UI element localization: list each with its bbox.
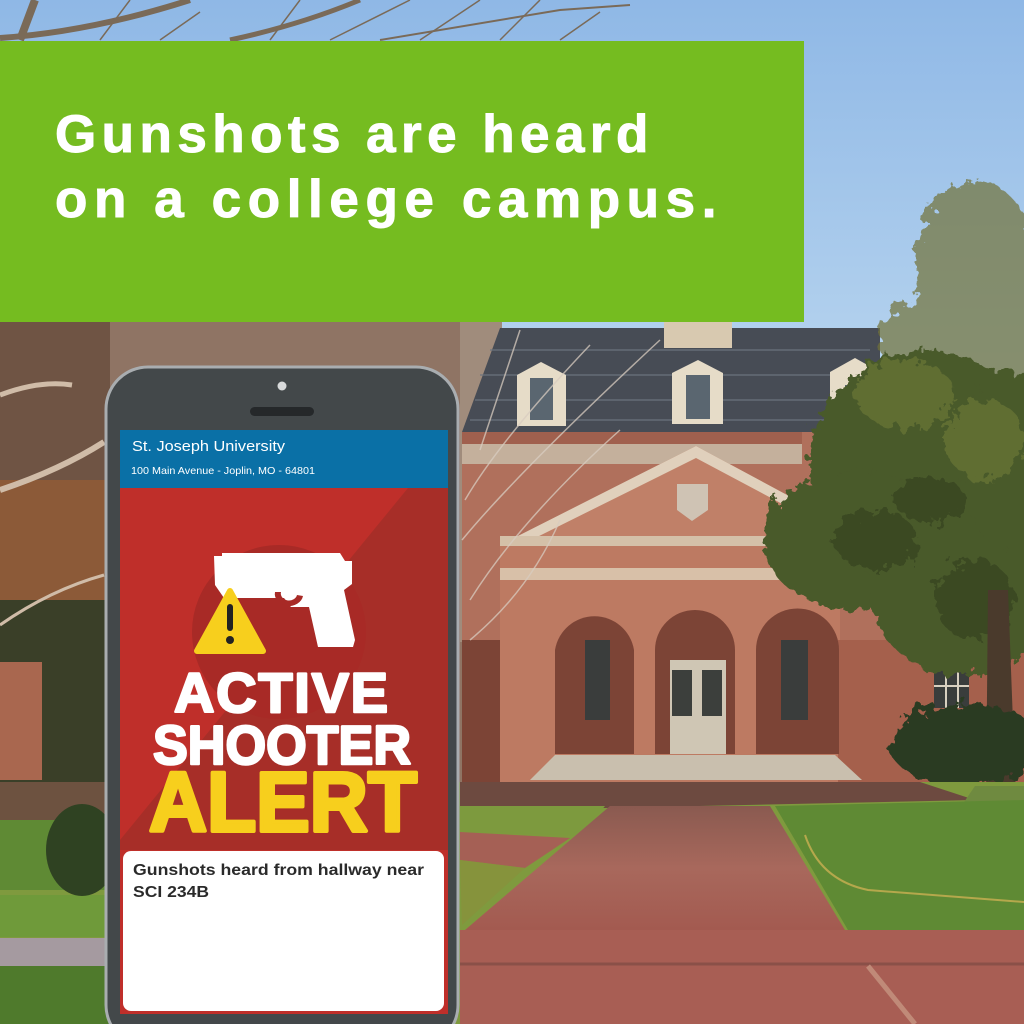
top branches <box>0 0 630 40</box>
alert title: ACTIVE <box>174 661 388 724</box>
shrub <box>890 703 1024 787</box>
headline: Gunshots are heard <box>55 105 654 164</box>
message box: SCI 234B <box>133 884 209 901</box>
arches <box>555 608 839 754</box>
left tree mass <box>0 322 470 792</box>
steps <box>530 755 862 780</box>
message box: Gunshots heard from hallway near <box>133 862 424 879</box>
headline: on a college campus. <box>55 170 723 229</box>
branches over building edge <box>460 322 502 642</box>
app header: St. Joseph University <box>132 439 286 455</box>
building body <box>462 432 1024 782</box>
alert title <box>149 661 417 849</box>
ground <box>0 782 1024 1024</box>
app header: 100 Main Avenue - Joplin, MO - 64801 <box>131 465 315 477</box>
alert title: SHOOTER <box>153 714 411 776</box>
dormers <box>517 358 880 426</box>
icon: gun with warning triangle <box>192 545 366 719</box>
green headline banner <box>0 41 804 322</box>
headline <box>55 105 723 229</box>
pediment <box>500 446 880 545</box>
message box <box>123 851 444 1011</box>
bare branches <box>462 330 660 640</box>
right tree <box>763 180 1024 675</box>
windows and door <box>585 640 969 720</box>
roof <box>462 328 880 432</box>
red alert panel <box>120 488 448 1014</box>
left branches <box>0 384 104 625</box>
phone body <box>106 367 458 1024</box>
app header <box>120 430 448 488</box>
alert title: ALERT <box>149 755 417 849</box>
